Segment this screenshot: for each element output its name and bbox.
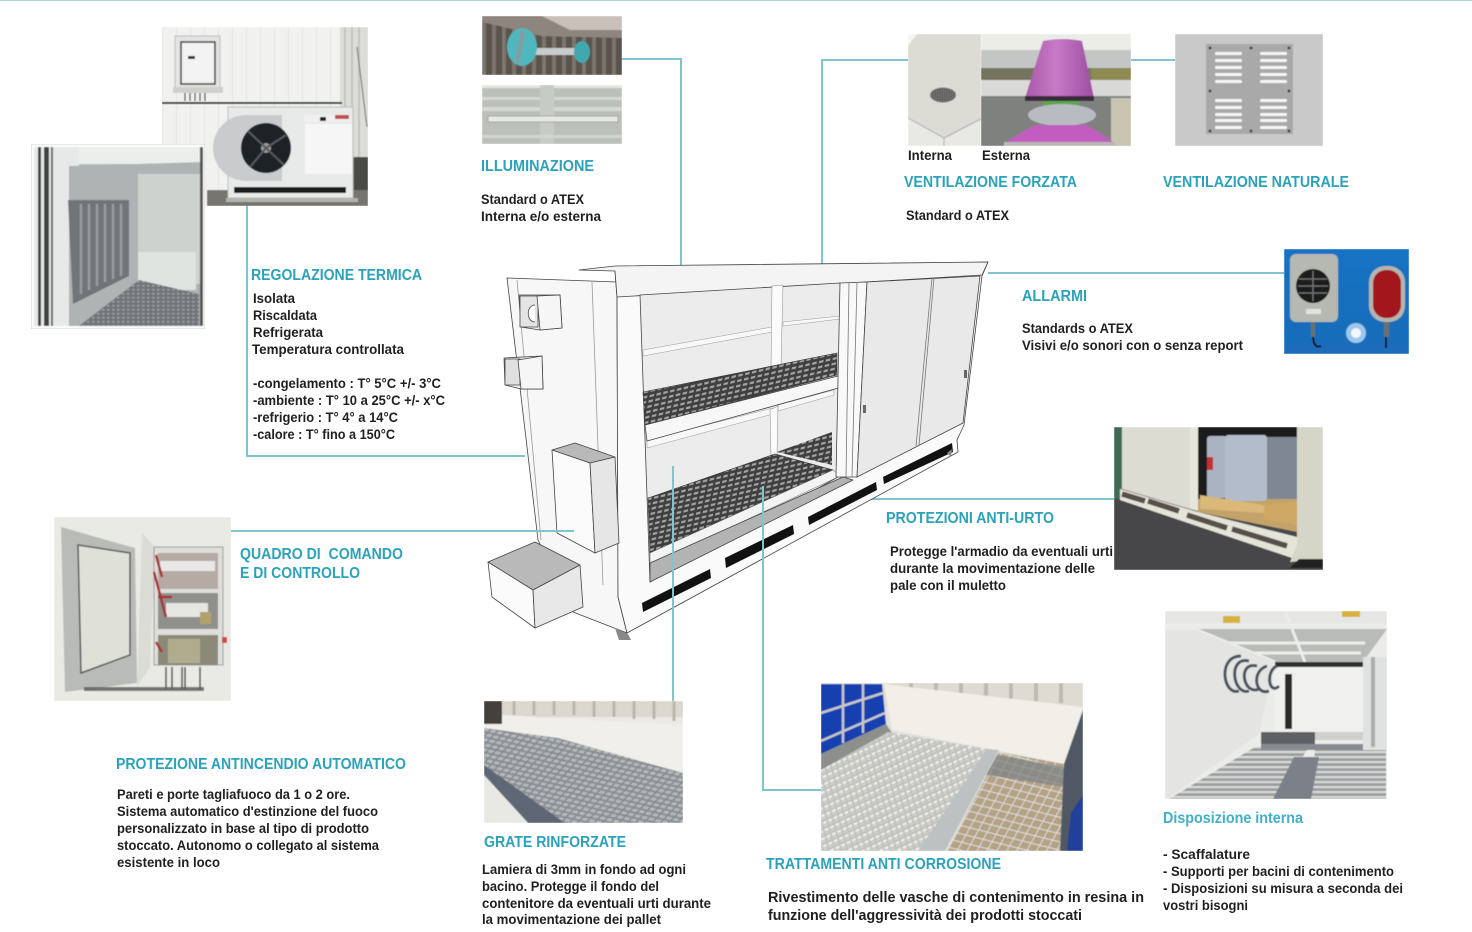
photo: forced ventilation inside xyxy=(908,34,981,146)
text: grate rinforzate: contenitore da eventuali urti durante xyxy=(482,896,711,911)
photo: forced ventilation outside xyxy=(981,34,1131,146)
feet xyxy=(615,628,631,640)
sliding doors xyxy=(857,276,980,477)
text: thermal options xyxy=(252,291,445,442)
text: grate rinforzate: la movimentazione dei pallet xyxy=(482,912,661,927)
control box xyxy=(552,443,619,553)
heading: protezioni anti-urto: PROTEZIONI ANTI-URTO xyxy=(886,510,1054,527)
text: thermal options: Refrigerata xyxy=(253,325,323,340)
text: trattamenti anti corrosione: funzione dell'aggressività dei prodotti stoccati xyxy=(768,907,1082,924)
caption: esterna: Esterna xyxy=(982,148,1030,163)
text: grate rinforzate: bacino. Protegge il fondo del xyxy=(482,879,659,894)
heading: ventilazione naturale: VENTILAZIONE NATURALE xyxy=(1163,174,1349,191)
text: thermal options: -congelamento : T° 5°C +/- 3°C xyxy=(253,376,441,391)
text: disposizione interna: - Scaffalature xyxy=(1163,847,1250,862)
block: protezioni anti-urto xyxy=(886,510,1113,593)
text: protezione antincendio: Sistema automatico d'estinzione del fuoco xyxy=(117,804,378,819)
text: protezioni anti-urto: Protegge l'armadio da eventuali urti xyxy=(890,544,1113,559)
ventilation slots xyxy=(642,443,953,612)
text: illuminazione xyxy=(481,192,601,224)
text: protezione antincendio: esistente in loco xyxy=(117,855,220,870)
photo: natural ventilation grille xyxy=(1175,34,1323,146)
text: trattamenti anti corrosione: Rivestimento delle vasche di contenimento in resina in xyxy=(768,889,1144,906)
lower shelf grate xyxy=(648,454,833,553)
text: protezione antincendio: stoccato. Autonomo o collegato al sistema xyxy=(117,838,379,853)
text: protezioni anti-urto xyxy=(890,544,1113,593)
heading: quadro di comando: QUADRO DI COMANDO xyxy=(240,546,403,563)
interior opening xyxy=(640,283,840,582)
central cabinet illustration xyxy=(488,262,988,640)
text: protezione antincendio: Pareti e porte tagliafuoco da 1 o 2 ore. xyxy=(117,787,350,802)
block: grate rinforzate xyxy=(482,834,711,927)
text: allarmi xyxy=(1022,321,1243,353)
block: disposizione interna xyxy=(1163,810,1403,913)
photo: control panel xyxy=(54,517,231,701)
block: allarmi xyxy=(1022,288,1243,353)
text: protezioni anti-urto: durante la movimentazione delle xyxy=(890,561,1095,576)
heading: quadro di comando: E DI CONTROLLO xyxy=(240,565,360,582)
text: thermal options: Temperatura controllata xyxy=(252,342,404,357)
text: disposizione interna: vostri bisogni xyxy=(1163,898,1248,913)
text: allarmi: Standards o ATEX xyxy=(1022,321,1133,336)
text: allarmi: Visivi e/o sonori con o senza report xyxy=(1022,338,1243,353)
photo: reinforced grids xyxy=(484,701,683,823)
photo: interior with evaporator xyxy=(31,144,205,329)
text: thermal options: Riscaldata xyxy=(253,308,317,323)
text: protezione antincendio xyxy=(117,787,379,870)
photo: alarms xyxy=(1284,249,1409,354)
block: regolazione termica xyxy=(251,267,445,442)
text: thermal options: -refrigerio : T° 4° a 14°C xyxy=(253,410,398,425)
text: thermal options: -calore : T° fino a 150°C xyxy=(253,427,395,442)
text: thermal options: Isolata xyxy=(253,291,295,306)
text: grate rinforzate: Lamiera di 3mm in fondo ad ogni xyxy=(482,862,686,877)
heading: quadro di comando xyxy=(240,546,403,582)
text: disposizione interna xyxy=(1163,847,1403,913)
heading: allarmi: ALLARMI xyxy=(1022,288,1087,305)
photo: anti-corrosion tray xyxy=(821,683,1083,851)
text: disposizione interna: - Disposizioni su misura a seconda dei xyxy=(1163,881,1403,896)
text: ventilazione forzata: Standard o ATEX xyxy=(906,208,1009,223)
heading: trattamenti anti corrosione: TRATTAMENTI ANTI CORROSIONE xyxy=(766,856,1001,873)
text: grate rinforzate xyxy=(482,862,711,927)
grey sill xyxy=(650,477,853,582)
heading: ventilazione forzata: VENTILAZIONE FORZATA xyxy=(904,174,1077,191)
connector lines xyxy=(247,59,1284,790)
heading: regolazione termica: REGOLAZIONE TERMICA xyxy=(251,267,422,284)
photo: interior layout xyxy=(1165,611,1387,799)
door pillar xyxy=(836,282,867,477)
photo: condenser unit xyxy=(162,27,368,206)
block: trattamenti anti corrosione xyxy=(766,856,1144,924)
heading: disposizione interna: Disposizione interna xyxy=(1163,810,1303,827)
callout lines over cabinet xyxy=(231,466,763,640)
lower vent box xyxy=(504,356,543,389)
floor box xyxy=(488,542,583,628)
side panel xyxy=(507,278,627,633)
text: trattamenti anti corrosione xyxy=(768,889,1144,924)
block: protezione antincendio xyxy=(116,756,406,870)
heading: grate rinforzate: GRATE RINFORZATE xyxy=(484,834,626,851)
rear lower grate xyxy=(777,432,832,465)
text: disposizione interna: - Supporti per bacini di contenimento xyxy=(1163,864,1394,879)
block: illuminazione xyxy=(481,158,601,224)
cabinet front frame xyxy=(615,262,988,633)
text: illuminazione: Interna e/o esterna xyxy=(481,209,601,224)
block: ventilazione forzata xyxy=(904,148,1077,223)
caption: interna: Interna xyxy=(908,148,952,163)
text: thermal options: -ambiente : T° 10 a 25°C +/- x°C xyxy=(253,393,445,408)
upper vent box xyxy=(519,295,562,330)
heading: illuminazione: ILLUMINAZIONE xyxy=(481,158,594,175)
upper shelf grate xyxy=(643,353,837,425)
photo: illumination suspended xyxy=(482,16,622,75)
photo: illumination fixture xyxy=(482,85,622,144)
text: protezioni anti-urto: pale con il muletto xyxy=(890,578,1006,593)
text: protezione antincendio: personalizzato in base al tipo di prodotto xyxy=(117,821,369,836)
photo: impact protection xyxy=(1114,427,1323,570)
text: illuminazione: Standard o ATEX xyxy=(481,192,584,207)
heading: protezione antincendio: PROTEZIONE ANTINCENDIO AUTOMATICO xyxy=(116,756,406,773)
